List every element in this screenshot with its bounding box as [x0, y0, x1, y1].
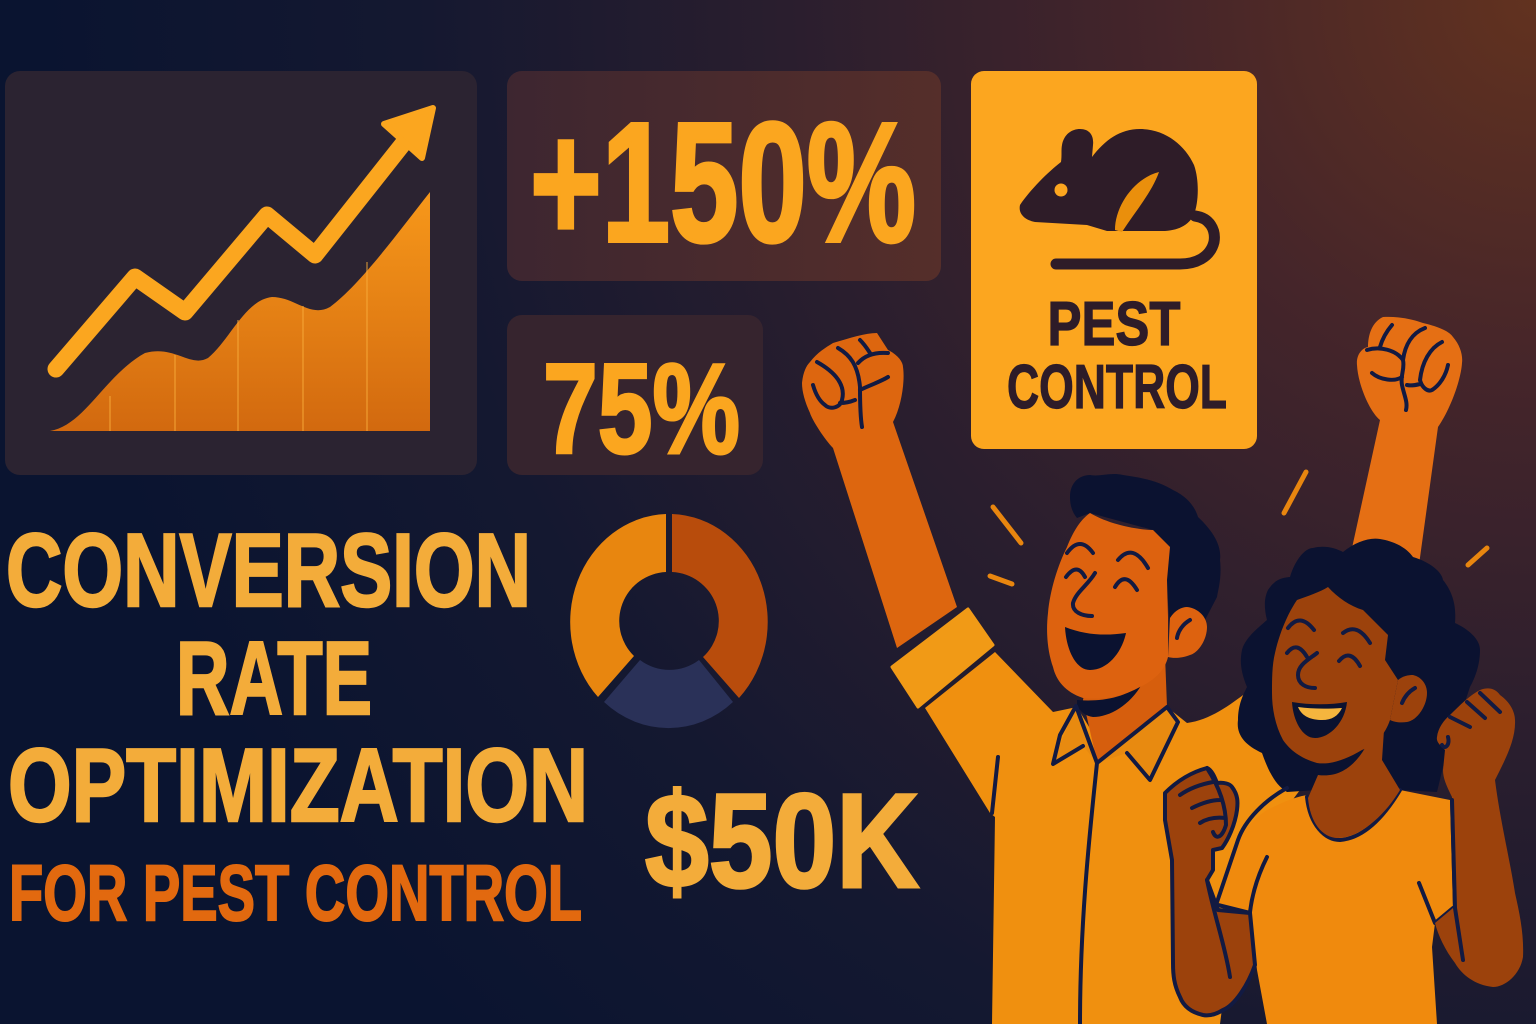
chart column lines [110, 262, 367, 431]
rat tail [1056, 216, 1214, 264]
rat haunch leaf [1115, 172, 1159, 232]
ear [1168, 607, 1207, 658]
panel: +150% stat [507, 71, 941, 281]
shirt [925, 652, 1300, 1024]
collar and placket [992, 706, 1178, 1024]
man figure [802, 333, 1300, 1024]
face features [1287, 620, 1415, 738]
neck [1308, 715, 1400, 838]
hair [1238, 539, 1480, 792]
face [1047, 513, 1170, 699]
neck [1083, 655, 1167, 762]
donut chart [570, 514, 768, 728]
$50K figure: $50K [645, 767, 919, 916]
chin shadow [1077, 684, 1142, 717]
hair [1070, 474, 1221, 625]
face features [1065, 544, 1190, 670]
panel: pest control card: PEST [1048, 290, 1181, 359]
title: RATE [176, 621, 372, 737]
right arm and fist [1435, 688, 1523, 987]
panel: growth chart [5, 71, 477, 475]
panel: 75% stat: 75% [543, 338, 740, 481]
icon: rat [1020, 129, 1214, 264]
woman figure [1165, 539, 1523, 1024]
woman's raised arm and fist [1352, 317, 1462, 572]
panel: +150% stat: +150% [530, 88, 916, 278]
title: OPTIMIZATION [8, 728, 588, 844]
raised arm and fist [802, 333, 957, 648]
title [6, 513, 588, 937]
title: CONVERSION [6, 513, 531, 629]
shirt lines [1216, 788, 1453, 923]
left arm and fist [1165, 768, 1255, 1015]
panel: pest control card: CONTROL [1007, 353, 1227, 422]
cuff [892, 609, 993, 707]
panel: 75% stat [507, 315, 763, 481]
title: FOR PEST CONTROL [9, 848, 582, 937]
celebration marks [990, 472, 1487, 584]
panel: pest control card [971, 71, 1257, 449]
area chart [50, 192, 430, 431]
ear [1390, 675, 1427, 722]
shirt top [1218, 790, 1453, 1024]
rat eye [1054, 184, 1068, 196]
trend line with arrow [56, 108, 433, 369]
face [1272, 587, 1398, 763]
